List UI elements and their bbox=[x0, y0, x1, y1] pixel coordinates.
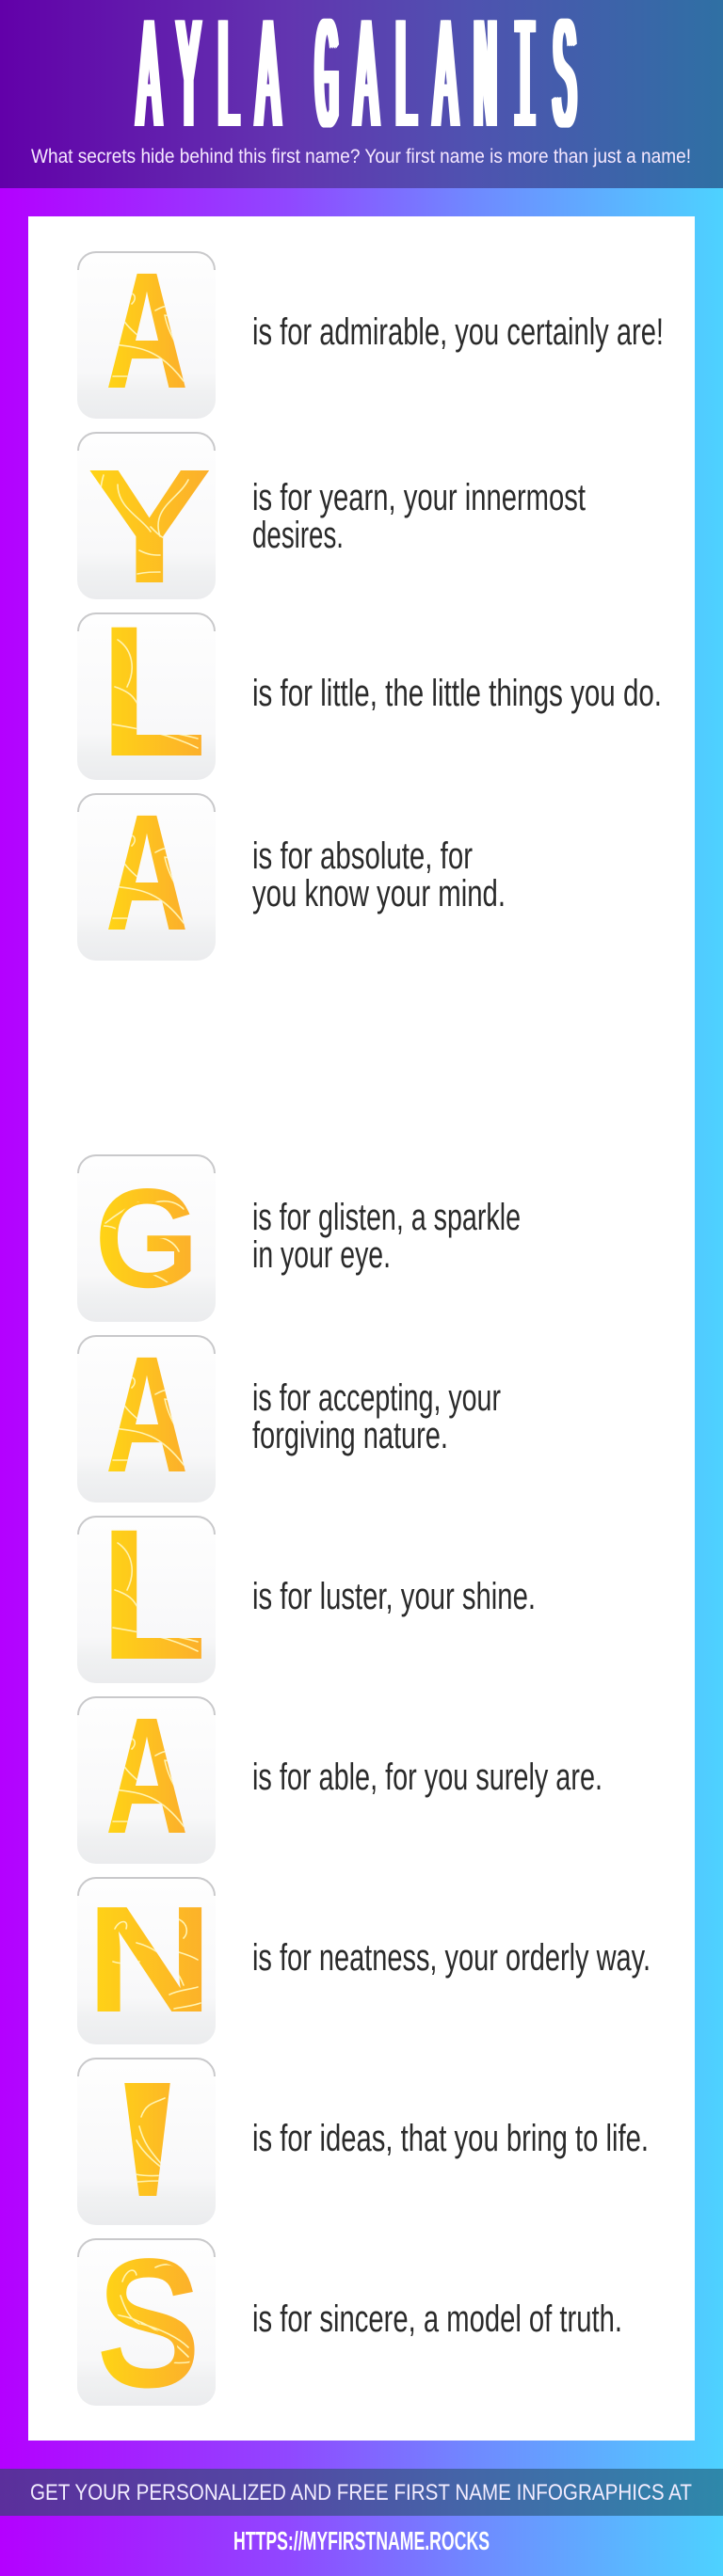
description: you know your mind. bbox=[252, 873, 506, 914]
footer url: HTTPS://MYFIRSTNAME.ROCKS bbox=[233, 2526, 490, 2555]
row: L little bbox=[77, 587, 662, 795]
tile: letter N: N bbox=[86, 1876, 214, 2044]
row: I ideas bbox=[77, 2047, 649, 2231]
description: is for glisten, a sparkle bbox=[252, 1197, 521, 1238]
description: is for yearn, your innermost bbox=[252, 477, 586, 518]
tile: letter S: S bbox=[98, 2225, 199, 2421]
row: A accepting bbox=[77, 1323, 501, 1507]
tile: letter I: I bbox=[102, 2047, 193, 2231]
description: desires. bbox=[252, 515, 344, 556]
row: S sincere bbox=[77, 2238, 619, 2406]
row: A absolute bbox=[77, 781, 506, 965]
tile: letter A: A bbox=[105, 1684, 188, 1868]
row: L luster bbox=[77, 1490, 536, 1698]
description: in your eye. bbox=[252, 1234, 391, 1276]
description: forgiving nature. bbox=[252, 1415, 448, 1456]
white content panel bbox=[28, 216, 695, 2441]
description: is for accepting, your bbox=[252, 1377, 501, 1419]
tile: letter A bbox=[77, 781, 216, 965]
description bbox=[252, 1197, 521, 1276]
row: G glisten bbox=[77, 1154, 521, 1322]
description bbox=[252, 1377, 501, 1456]
tile: letter G: G bbox=[96, 1164, 198, 1312]
tile: letter A: A bbox=[105, 239, 188, 423]
tile: letter L bbox=[77, 1516, 216, 1683]
description: is for luster, your shine. bbox=[252, 1576, 536, 1617]
tile: letter A bbox=[77, 1323, 216, 1507]
header band bbox=[0, 0, 723, 188]
tile: letter G bbox=[77, 1154, 216, 1322]
tile: letter S bbox=[77, 2238, 216, 2406]
tile: letter L bbox=[77, 612, 216, 780]
tile: letter I bbox=[77, 2047, 216, 2231]
description bbox=[252, 477, 586, 556]
tile: letter L: L bbox=[100, 1490, 207, 1698]
tile: letter Y: Y bbox=[87, 436, 212, 617]
tile: letter A bbox=[77, 239, 216, 423]
row: A able bbox=[77, 1684, 602, 1868]
row: A admirable bbox=[77, 239, 664, 423]
tile: letter L: L bbox=[100, 587, 207, 795]
tile: letter A: A bbox=[105, 1323, 188, 1507]
footer band bbox=[0, 2469, 723, 2516]
row: N neatness bbox=[77, 1876, 651, 2044]
tile: letter A: A bbox=[105, 781, 188, 965]
row: Y yearn bbox=[77, 432, 586, 617]
description bbox=[252, 835, 506, 914]
tile: letter A bbox=[77, 1684, 216, 1868]
description: is for absolute, for bbox=[252, 835, 473, 877]
